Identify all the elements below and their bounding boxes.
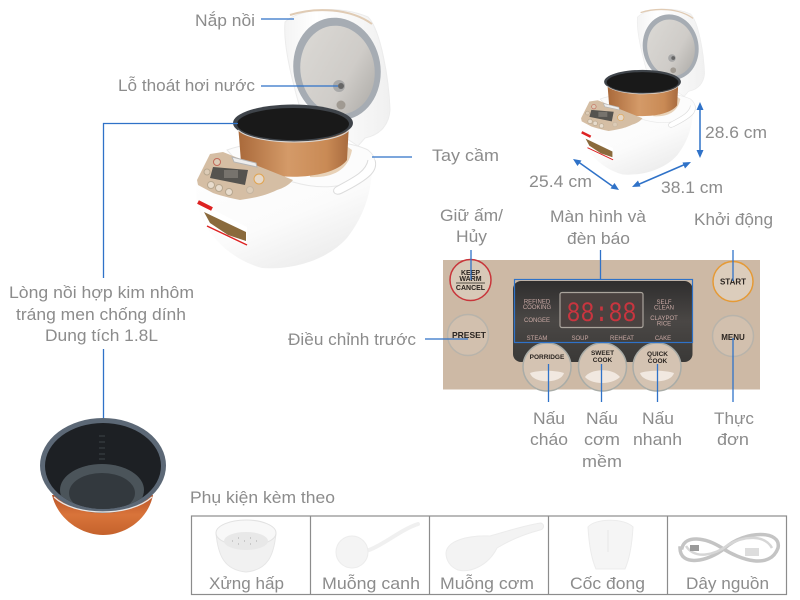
line: steam vent: [261, 85, 338, 87]
accessory: measuring cup: Cốc đong: [570, 575, 645, 593]
button: keep warm / cancel: KEEP: [461, 270, 480, 277]
button: preset: [448, 314, 488, 356]
display indicator labels: STEAM: [527, 336, 547, 342]
line: menu: [732, 338, 734, 402]
label: soft rice: mềm: [582, 453, 622, 471]
label: height: 28.6 cm: [705, 124, 767, 142]
button: sweet cook: COOK: [593, 357, 613, 364]
line: display: [600, 250, 602, 279]
display indicator labels: REFINED: [524, 300, 551, 306]
accessory: rice paddle: Muỗng cơm: [440, 574, 534, 593]
line: start: [732, 250, 734, 281]
display indicator labels: [523, 300, 678, 342]
label: keep warm: Giữ ấm/: [440, 207, 503, 225]
display indicator labels: COOKING: [523, 305, 551, 311]
button: start: START: [720, 278, 746, 286]
button: porridge: PORRIDGE: [530, 354, 565, 361]
label: lid: Nắp nồi: [195, 11, 255, 30]
label: menu: đơn: [717, 431, 749, 449]
display indicator labels: CLEAN: [654, 306, 674, 312]
display indicator labels: SELF: [656, 300, 672, 306]
button: preset: PRESET: [452, 330, 487, 340]
label: inner pot: tráng men chống dính: [16, 306, 186, 324]
dimension arrows: [573, 102, 704, 190]
line: porridge: [548, 364, 550, 402]
small rice cooker photo: [580, 9, 705, 175]
line: quick cook: [656, 364, 658, 402]
line: handle: [372, 156, 412, 158]
label: start: Khởi động: [694, 211, 773, 229]
line: inner pot lower: [102, 349, 104, 419]
display highlight box: [514, 280, 692, 342]
button: menu: MENU: [721, 333, 745, 342]
control panel: [443, 260, 760, 391]
accessory: power cord: Dây nguồn: [686, 575, 769, 593]
label: display: [550, 208, 647, 248]
arrow: depth: [573, 159, 619, 190]
button: menu: [712, 316, 754, 356]
label: inner pot: Lòng nồi hợp kim nhôm: [9, 284, 194, 302]
line: sweet cook: [600, 364, 602, 402]
line: keep warm: [470, 250, 472, 280]
button: keep warm / cancel: [450, 260, 491, 300]
arrow: width: [632, 162, 691, 187]
label: soft rice: Nấu: [586, 410, 618, 428]
line: preset: [425, 338, 468, 340]
accessory: power cord: [680, 534, 778, 593]
label: porridge: [530, 410, 568, 449]
button: keep warm / cancel: CANCEL: [456, 285, 486, 292]
accessory: rice paddle: [440, 523, 544, 593]
display indicator labels: REHEAT: [610, 336, 634, 342]
button: start: [713, 262, 753, 302]
accessory: steamer: [209, 520, 284, 593]
label: display: đèn báo: [567, 230, 630, 248]
label: menu: Thực: [714, 410, 754, 428]
inner pot photo: [40, 418, 166, 535]
display indicator labels: CAKE: [655, 336, 671, 342]
main rice cooker photo: [196, 10, 390, 268]
accessory: soup ladle: Muỗng canh: [322, 574, 420, 593]
label: handle: Tay cầm: [432, 147, 499, 165]
label: quick: Nấu: [642, 410, 674, 428]
accessories table: [192, 516, 786, 594]
label: depth: 25.4 cm: [529, 173, 592, 191]
label: display: Màn hình và: [550, 208, 647, 226]
heading: accessories: Phụ kiện kèm theo: [190, 489, 335, 507]
display housing: [513, 281, 692, 362]
label: quick: nhanh: [633, 431, 682, 449]
label: keep warm: Hủy: [456, 228, 488, 246]
arrow: height: [696, 102, 704, 158]
label: steam vent: Lỗ thoát hơi nước: [118, 76, 255, 95]
line: lid: [261, 18, 294, 20]
line: inner pot upper: [104, 124, 238, 278]
button: sweet cook: [578, 343, 626, 391]
label: inner pot: Dung tích 1.8L: [45, 327, 158, 345]
label: soft rice: [582, 410, 622, 471]
label: menu: [714, 410, 754, 449]
button: porridge: [523, 343, 571, 391]
label: preset: Điều chỉnh trước: [288, 331, 416, 349]
button: quick cook: [633, 343, 681, 391]
label: width: 38.1 cm: [661, 179, 723, 197]
label: porridge: Nấu: [533, 410, 565, 428]
button: sweet cook: SWEET: [591, 350, 614, 357]
accessory: soup ladle: [322, 524, 420, 593]
label: inner pot: [9, 284, 194, 345]
display screen: 88:88: [566, 299, 636, 330]
display indicator labels: RICE: [657, 322, 671, 328]
display indicator labels: SOUP: [571, 336, 589, 342]
label: porridge: cháo: [530, 431, 568, 449]
button: quick cook: QUICK: [647, 351, 668, 358]
button: quick cook: COOK: [648, 358, 668, 365]
label: keep warm: [440, 207, 503, 246]
display indicator labels: CLAYPOT: [650, 316, 678, 322]
accessory: measuring cup: [570, 520, 645, 593]
label: soft rice: cơm: [584, 431, 620, 449]
label: quick: [633, 410, 682, 449]
button: keep warm / cancel: WARM: [459, 276, 482, 283]
display indicator labels: CONGEE: [524, 318, 550, 324]
accessory: steamer: Xửng hấp: [209, 575, 284, 593]
